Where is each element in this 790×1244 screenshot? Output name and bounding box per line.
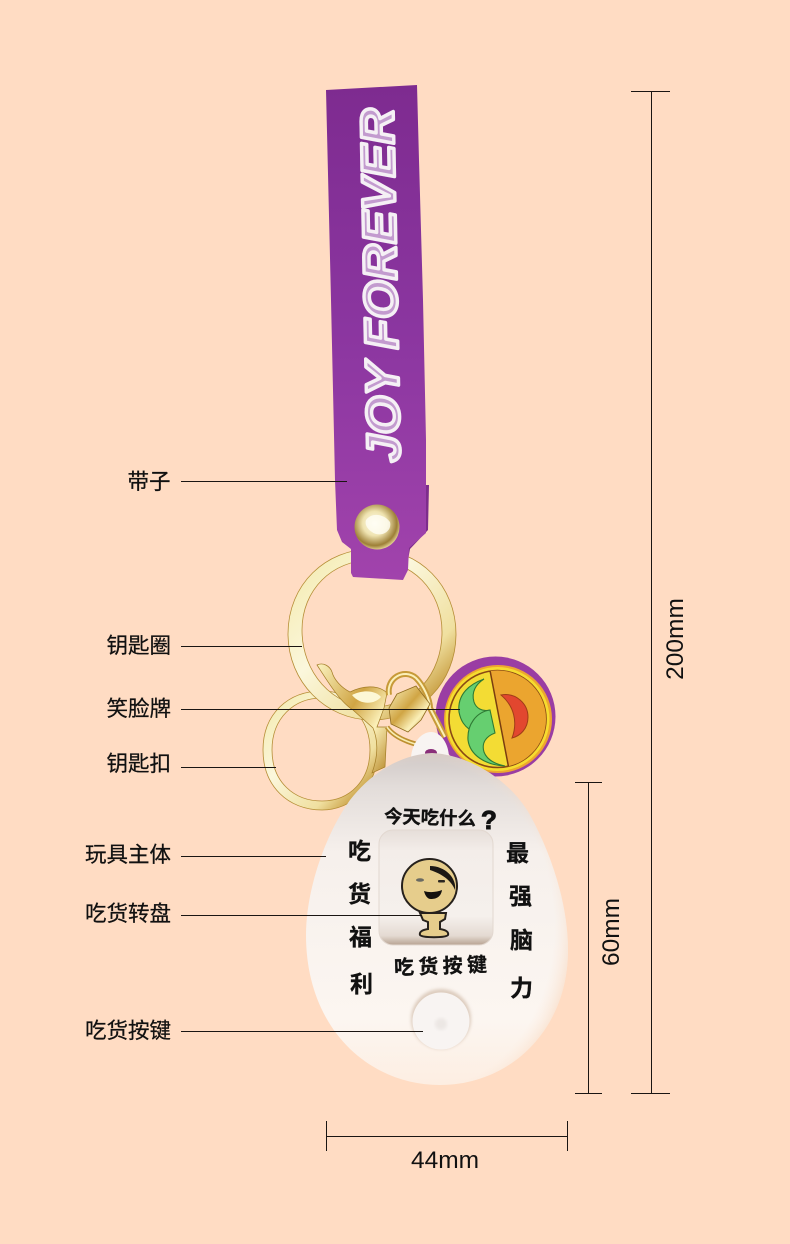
body print: 货 bbox=[348, 881, 371, 907]
smiley badge bbox=[436, 656, 556, 776]
body print: 最 bbox=[506, 840, 529, 866]
dimension: 200mm bbox=[631, 91, 689, 1094]
clasp swivel bbox=[387, 674, 445, 749]
lobster clasp bbox=[317, 664, 445, 773]
dimension: 200mm: 200mm bbox=[662, 598, 689, 680]
dimension: 60mm: 60mm bbox=[598, 898, 625, 966]
strap back layer bbox=[404, 485, 429, 560]
part labels: 带子 bbox=[127, 470, 170, 494]
part labels bbox=[85, 470, 171, 1043]
character on dial bbox=[402, 859, 457, 937]
leader lines bbox=[181, 482, 460, 1032]
viewing window bbox=[379, 830, 493, 945]
strap main bbox=[326, 85, 426, 580]
body print: 利 bbox=[350, 971, 373, 997]
part labels: 笑脸牌 bbox=[106, 697, 171, 721]
body print: 脑 bbox=[510, 927, 533, 953]
egg shell bbox=[306, 753, 568, 1085]
body print: 吃 bbox=[348, 838, 371, 864]
button bbox=[411, 989, 471, 1050]
part labels: 吃货按键 bbox=[85, 1019, 171, 1043]
part labels: 吃货转盘 bbox=[85, 902, 171, 926]
strap text: JOY FOREVER bbox=[350, 108, 410, 463]
strap bbox=[326, 85, 429, 580]
toy body bbox=[306, 732, 568, 1085]
clasp ring bbox=[263, 691, 378, 810]
part labels: 玩具主体 bbox=[85, 843, 171, 867]
body print: 吃货按键 bbox=[394, 952, 487, 980]
dimension: 44mm: 44mm bbox=[411, 1147, 479, 1174]
key ring bbox=[288, 549, 456, 720]
part labels: 钥匙扣 bbox=[106, 752, 171, 776]
dimension: 44mm bbox=[326, 1121, 568, 1174]
body print: 福 bbox=[349, 924, 372, 950]
loop on top of body bbox=[411, 732, 449, 760]
body print: 强 bbox=[509, 883, 532, 909]
body print bbox=[348, 805, 533, 1001]
body print: 力 bbox=[510, 975, 533, 1001]
shell edge glow bbox=[306, 753, 568, 1085]
body print: ? bbox=[481, 805, 497, 835]
rivet bbox=[354, 504, 400, 550]
part labels: 钥匙圈 bbox=[106, 634, 171, 658]
dimension: 60mm bbox=[575, 782, 625, 1094]
body print: 今天吃什么 bbox=[384, 806, 476, 829]
